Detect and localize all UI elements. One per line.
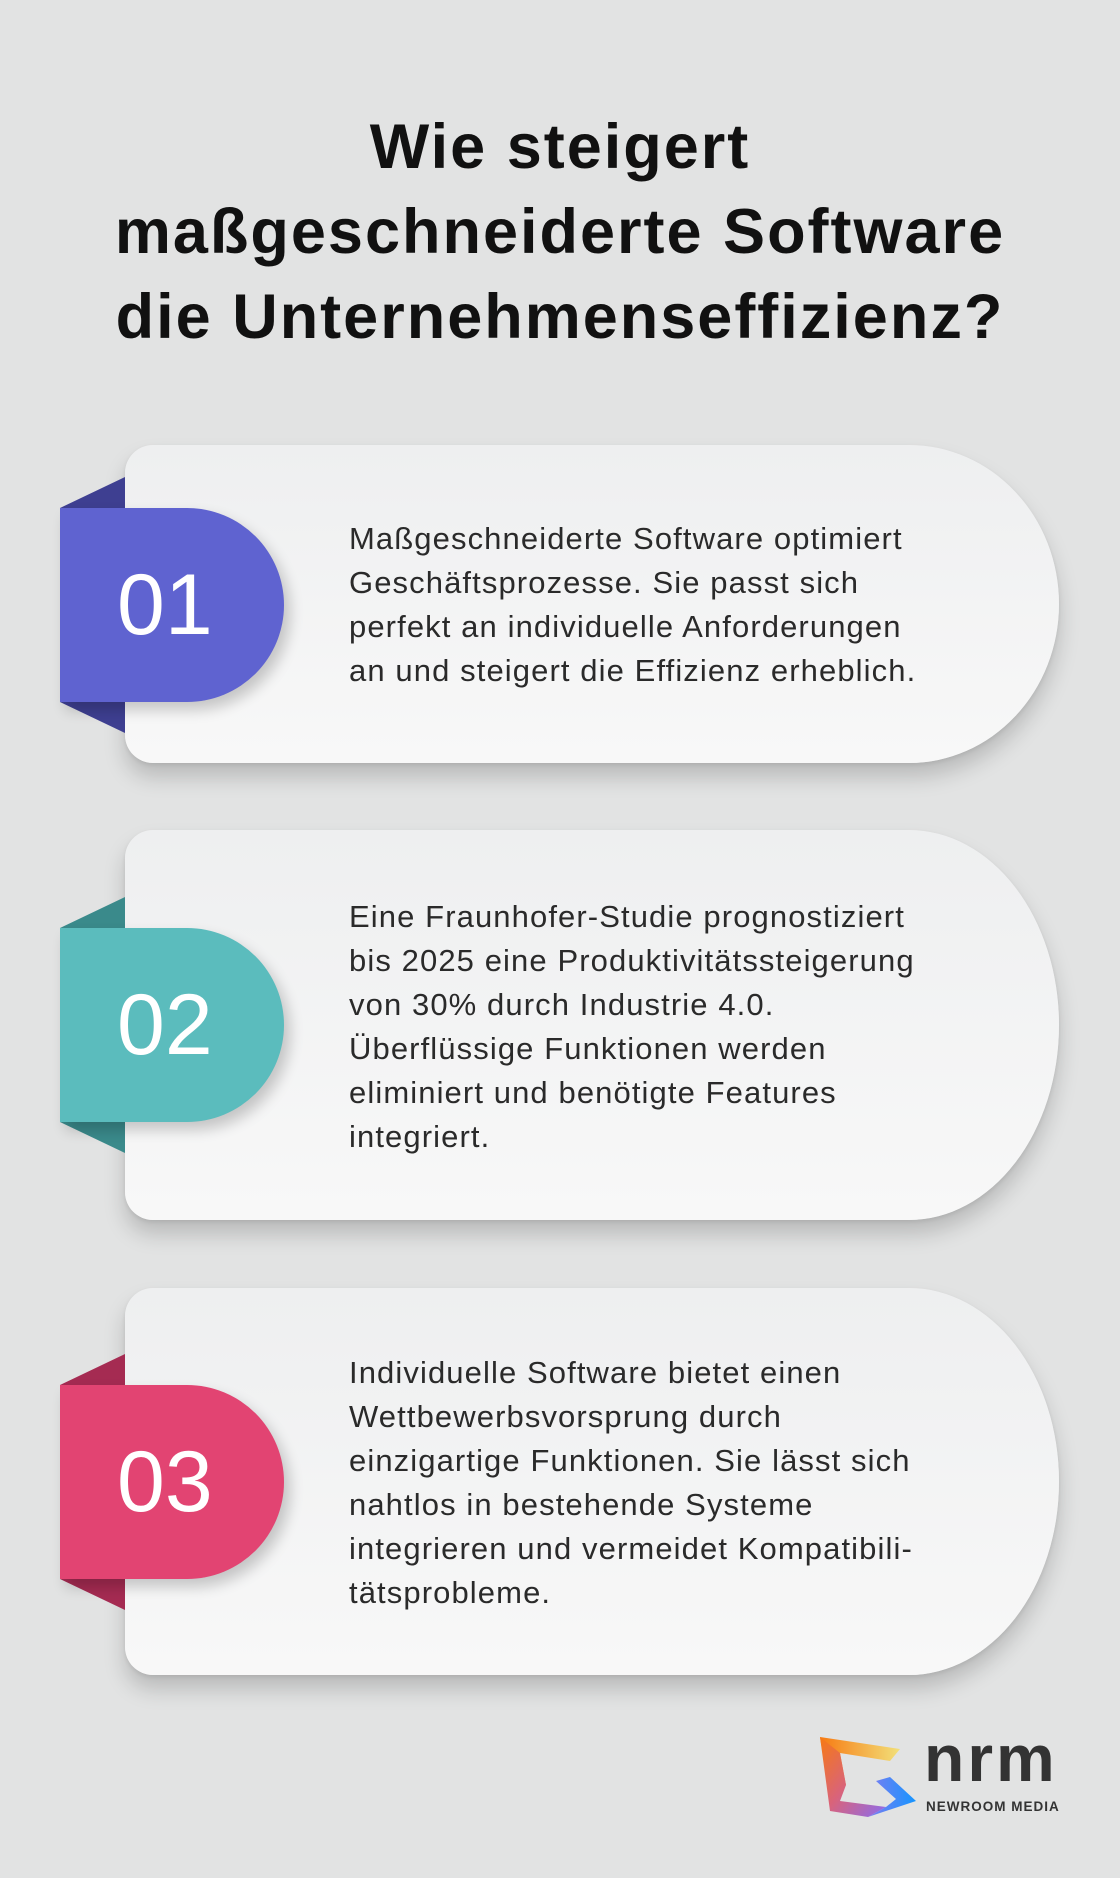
- title: [115, 112, 1005, 352]
- text 2: Überflüssige Funktionen werden: [349, 1031, 827, 1066]
- title: maßgeschneiderte Software: [115, 197, 1005, 267]
- text 3: Individuelle Software bietet einen: [349, 1355, 841, 1390]
- fold bottom 2: [60, 1122, 125, 1153]
- text 3: tätsprobleme.: [349, 1575, 551, 1610]
- text 3: [349, 1355, 913, 1610]
- badge 03: [60, 1385, 284, 1579]
- text 1: perfekt an individuelle Anforderungen: [349, 609, 902, 644]
- fold bottom 1: [60, 702, 125, 733]
- badge 01: 01: [117, 557, 213, 653]
- text 3: nahtlos in bestehende Systeme: [349, 1487, 813, 1522]
- badge 02: [60, 928, 284, 1122]
- fold top 3: [60, 1354, 125, 1385]
- badge 01: [60, 508, 284, 702]
- text 2: eliminiert und benötigte Features: [349, 1075, 837, 1110]
- card 1: [125, 445, 1059, 763]
- title: die Unternehmenseffizienz?: [116, 282, 1004, 352]
- logo: [820, 1721, 1060, 1817]
- logo text: nrm: [924, 1721, 1058, 1795]
- text 3: einzigartige Funktionen. Sie lässt sich: [349, 1443, 911, 1478]
- title: Wie steigert: [370, 112, 750, 182]
- badge 03: 03: [117, 1434, 213, 1530]
- fold top 1: [60, 477, 125, 508]
- text 2: Eine Fraunhofer-Studie prognostiziert: [349, 899, 905, 934]
- card 3: [125, 1288, 1059, 1675]
- text 2: von 30% durch Industrie 4.0.: [349, 987, 774, 1022]
- card 2: [125, 830, 1059, 1220]
- text 1: Geschäftsprozesse. Sie passt sich: [349, 565, 859, 600]
- text 1: [349, 521, 916, 688]
- text 2: integriert.: [349, 1119, 490, 1154]
- text 3: Wettbewerbsvorsprung durch: [349, 1399, 782, 1434]
- fold top 2: [60, 897, 125, 928]
- text 1: Maßgeschneiderte Software optimiert: [349, 521, 903, 556]
- text 1: an und steigert die Effizienz erheblich.: [349, 653, 916, 688]
- fold bottom 3: [60, 1579, 125, 1610]
- badge 02: 02: [117, 977, 213, 1073]
- logo: NEWROOM MEDIA: [926, 1799, 1060, 1814]
- icon: logo mark: [820, 1737, 916, 1817]
- text 2: [349, 899, 915, 1154]
- text 2: bis 2025 eine Produktivitätssteigerung: [349, 943, 915, 978]
- text 3: integrieren und vermeidet Kompatibili-: [349, 1531, 913, 1566]
